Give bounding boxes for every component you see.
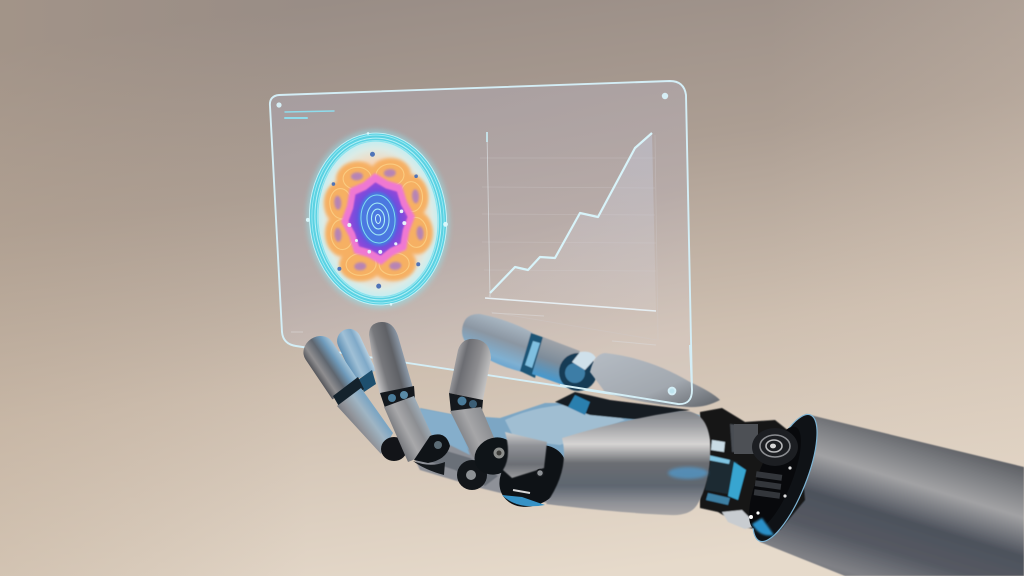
circular hologram [300, 127, 453, 311]
middle palm section [503, 432, 547, 478]
line chart [480, 132, 658, 340]
lower knuckle [413, 460, 487, 490]
thumb [462, 314, 597, 391]
finger 3 [369, 322, 450, 463]
finger 3 knuckle [414, 434, 450, 463]
wrist ring [739, 407, 830, 549]
finger 4 knuckle [468, 431, 522, 481]
finger 3 tip [369, 322, 413, 395]
holographic panel [270, 81, 692, 404]
chart grid [480, 135, 658, 340]
thumb tip segment [462, 314, 533, 372]
finger 1 base segment [337, 388, 393, 454]
finger 2 joint [358, 370, 376, 392]
palm blue reflection [668, 467, 708, 479]
finger 4 joint [449, 393, 483, 412]
thumb second segment [532, 337, 580, 386]
back of hand [420, 392, 700, 470]
finger 1 knuckle [381, 437, 407, 461]
finger 1 joint [333, 377, 364, 408]
palm dark ring [487, 432, 579, 520]
panel outline [270, 81, 692, 404]
palm knuckle screw [536, 470, 544, 476]
finger 1 tip [298, 330, 359, 399]
chart line [490, 133, 652, 293]
wrist mechanism [700, 408, 805, 530]
hologram outer rings [304, 128, 452, 310]
panel edge over thumb [560, 345, 692, 404]
hand [298, 314, 720, 520]
palm shell [546, 411, 710, 515]
chart area fill [486, 133, 656, 311]
finger 2 (behind) [333, 325, 376, 380]
finger 4 tip [449, 339, 491, 400]
panel header lines [285, 111, 334, 118]
finger 4 [449, 339, 498, 457]
finger 1 [298, 330, 407, 461]
base metal of hand [405, 408, 560, 505]
finger 3 joint [380, 386, 415, 408]
hologram core [338, 171, 418, 267]
hologram nodes [329, 149, 426, 291]
thumb cover plate [590, 353, 720, 407]
forearm [760, 414, 1024, 576]
corner dots [276, 93, 668, 108]
finger 3 base segment [384, 396, 435, 462]
wrist dial [734, 424, 798, 466]
thumb joint [520, 333, 545, 378]
thumb hub [559, 353, 597, 391]
hologram glints [300, 127, 453, 311]
chart axes [485, 132, 656, 311]
finger 4 base segment [450, 407, 498, 457]
hologram petals [320, 155, 436, 286]
small caption marks [291, 313, 656, 345]
